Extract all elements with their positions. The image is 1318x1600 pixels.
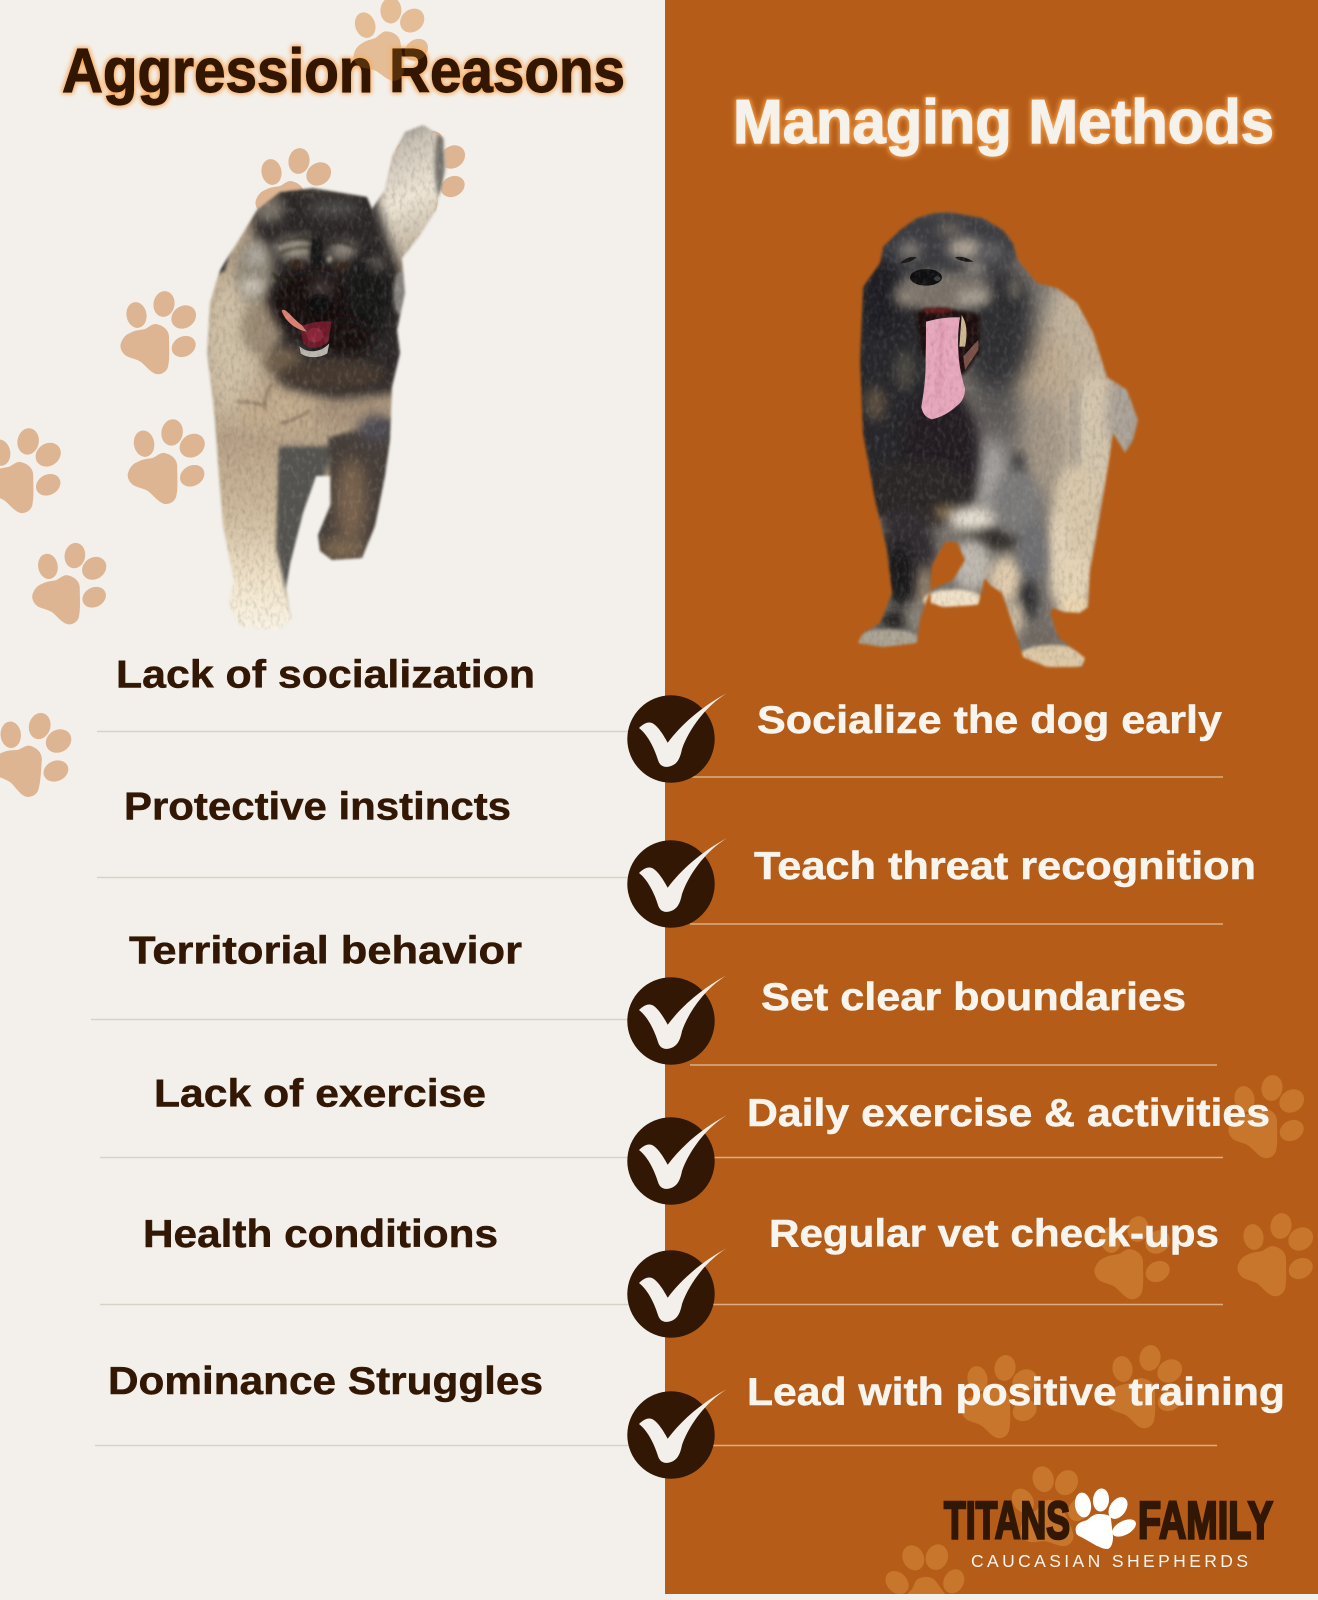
right column dividers [690,777,1223,1446]
method: lead with positive training: Lead with positive training [747,1371,1285,1414]
icon: check badge 3 [627,975,727,1065]
icon: check badge 5 [627,1248,727,1338]
method: teach threat recognition: Teach threat recognition [754,845,1256,888]
icon: check badge 6 [627,1389,727,1479]
logo: titans family caucasian shepherds: TITANS [944,1492,1070,1550]
reason: protective instincts: Protective instincts [124,786,511,828]
icon: check badge 1 [627,693,727,783]
illustration: running dog [206,124,448,630]
title: aggression reasons: Aggression Reasons [62,37,625,106]
method: set clear boundaries: Set clear boundaries [761,976,1186,1019]
illustration: panting dog [857,210,1140,669]
title: managing methods: Managing Methods [733,88,1274,157]
panel: managing methods background [665,0,1318,1594]
reason: dominance struggles: Dominance Struggles [108,1360,543,1403]
method: daily exercise and activities: Daily exercise & activities [747,1092,1270,1135]
right panel paw prints [869,1073,1318,1600]
method: regular vet check-ups: Regular vet check-ups [769,1212,1219,1256]
logo: titans family caucasian shepherds: CAUCASIAN SHEPHERDS [971,1551,1248,1571]
reason: health conditions: Health conditions [143,1213,498,1256]
icon: check badge 2 [627,838,727,928]
left column dividers [91,732,670,1446]
title paw overlap tint [346,0,437,86]
reason: lack of socialization: Lack of socialization [116,654,535,696]
left panel paw prints [0,0,470,801]
reason: lack of exercise: Lack of exercise [154,1072,486,1116]
logo: titans family caucasian shepherds [944,1488,1273,1571]
method: socialize the dog early: Socialize the dog early [757,699,1222,742]
reason: territorial behavior: Territorial behavior [129,930,522,972]
icon: check badge 4 [627,1115,727,1205]
